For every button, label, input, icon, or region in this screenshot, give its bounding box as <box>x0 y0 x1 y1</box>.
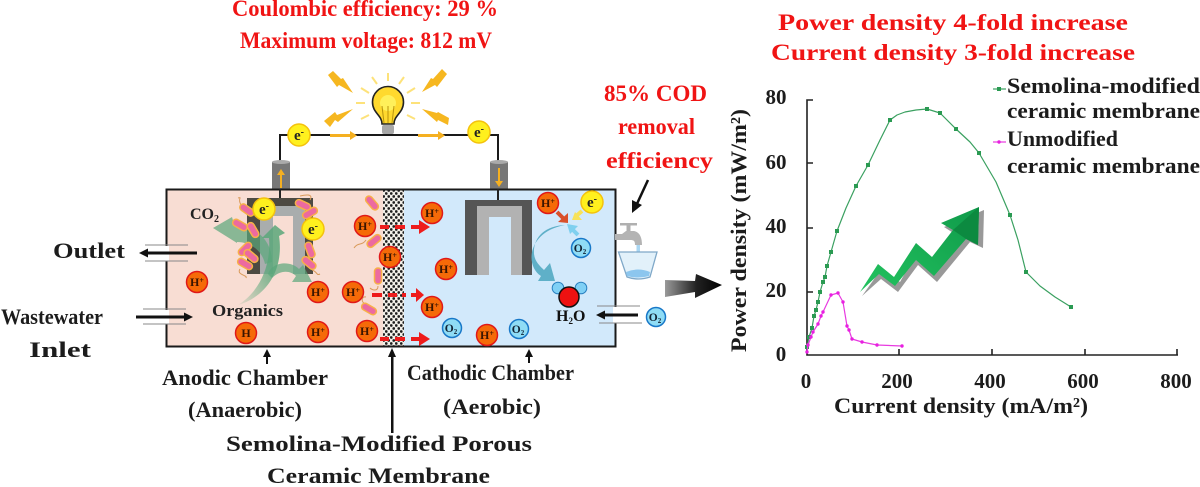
curved arrow to water <box>532 225 565 281</box>
protons: + <box>320 326 325 335</box>
y tick labels: 80 <box>766 85 786 109</box>
protons: H <box>360 324 369 338</box>
label: cathodic chamber: Cathodic Chamber <box>407 360 574 385</box>
x tick labels: 800 <box>1160 369 1192 393</box>
wire current arrows <box>330 131 445 140</box>
protons: + <box>320 286 325 295</box>
label: cathodic chamber <box>407 360 574 419</box>
heading: cell performance <box>232 0 498 53</box>
icon: green rising arrow <box>860 207 984 296</box>
x tick labels: 400 <box>974 369 1006 393</box>
reaction arrows at cathode <box>557 211 582 235</box>
chamber outline <box>166 190 616 346</box>
y tick labels: 40 <box>766 214 786 238</box>
callout: COD removal: removal <box>618 114 695 139</box>
callout: COD removal <box>604 81 714 173</box>
legend: semolina-modified <box>993 73 1200 123</box>
y axis title: Power density (mW/m²) <box>726 109 751 352</box>
electron in cathode: e <box>587 195 594 211</box>
oxygen molecules: 2 <box>521 329 525 337</box>
icon: light bulb <box>356 73 420 134</box>
arrow: cathodic pointer <box>525 349 533 363</box>
legend: semolina-modified: ceramic membrane <box>1007 98 1200 123</box>
protons: H <box>311 325 320 339</box>
protons: H <box>480 328 489 342</box>
x tick labels: 200 <box>881 369 913 393</box>
port: outlet <box>139 245 197 261</box>
port: inlet <box>136 309 193 324</box>
cathode electrode <box>465 189 532 275</box>
oxygen molecules: O <box>649 312 658 324</box>
y tick labels: 20 <box>766 278 786 302</box>
green metabolism arrows <box>213 217 312 305</box>
oxygen molecules: O <box>512 324 521 336</box>
protons: + <box>369 325 374 334</box>
protons: H <box>541 196 550 210</box>
port: oxygen inlet <box>596 306 642 323</box>
legend: semolina-modified: Semolina-modified <box>1007 73 1200 98</box>
y tick labels <box>766 85 786 366</box>
electron on anode side <box>302 218 324 240</box>
protons: H <box>346 285 355 299</box>
protons <box>186 192 558 346</box>
label: cathodic chamber: (Aerobic) <box>443 394 541 419</box>
icon: tap and glass <box>615 223 657 279</box>
label: H2O: O <box>573 308 585 325</box>
label: Organics: Organics <box>212 301 283 320</box>
protons: H <box>190 275 199 289</box>
label: outlet: Outlet <box>53 238 126 263</box>
label: membrane: Semolina-Modified Porous <box>226 431 533 456</box>
panel: cathodic chamber <box>404 189 615 347</box>
oxygen molecules: 2 <box>658 317 662 325</box>
heading: fold increases: Current density 3-fold increase <box>771 40 1135 65</box>
electron on wire right: - <box>481 124 484 135</box>
callout: COD removal: 85% COD <box>604 81 707 106</box>
protons: + <box>355 286 360 295</box>
label: CO2: 2 <box>214 214 219 225</box>
oxygen molecules: 2 <box>454 328 458 336</box>
external circuit wire <box>280 135 498 161</box>
electron on wire left: e <box>294 128 301 144</box>
x tick labels: 600 <box>1067 369 1099 393</box>
series: unmodified <box>805 291 904 354</box>
protons: H <box>425 206 434 220</box>
chart: power density curves <box>726 85 1192 418</box>
label: H2O: H <box>556 308 568 325</box>
oxygen molecules <box>442 238 666 338</box>
legend: unmodified: ceramic membrane <box>1007 153 1200 178</box>
protons: H <box>358 219 367 233</box>
callout: COD removal: efficiency <box>606 148 714 173</box>
protons: + <box>550 197 555 206</box>
protons: + <box>367 220 372 229</box>
arrow: COD to outlet tap <box>632 180 648 213</box>
panel: anodic chamber <box>166 189 384 347</box>
oxygen molecules: O <box>445 323 454 335</box>
electron on anode top <box>253 198 275 220</box>
electron on anode side: - <box>315 221 318 232</box>
icon: lightning bolts <box>324 69 449 127</box>
protons: H <box>425 300 434 314</box>
proton transfer dashes and arrows <box>372 220 430 346</box>
anode electrode <box>247 189 313 274</box>
protons: + <box>434 207 439 216</box>
electron on anode top: - <box>266 201 269 212</box>
label: wastewater inlet: Wastewater <box>1 304 103 329</box>
water molecule <box>552 282 587 307</box>
label: anodic chamber <box>162 365 328 422</box>
semolina-modified porous ceramic membrane <box>383 190 404 346</box>
x tick labels <box>801 369 1192 393</box>
arrow: membrane pointer <box>388 348 396 433</box>
label: anodic chamber: Anodic Chamber <box>162 365 328 390</box>
label: H2O: 2 <box>568 316 573 326</box>
electron on anode side: e <box>308 222 315 238</box>
anode terminal <box>272 160 290 189</box>
electron on wire right <box>468 121 490 143</box>
heading: fold increases: Power density 4-fold increase <box>778 10 1128 35</box>
protons: + <box>448 263 453 272</box>
cathode terminal <box>490 160 508 189</box>
label: anodic chamber: (Anaerobic) <box>188 397 302 422</box>
arrow: to chart <box>665 274 722 298</box>
heading: fold increases <box>771 10 1135 65</box>
electron in cathode <box>581 191 603 213</box>
oxygen molecules: O <box>574 243 583 255</box>
y tick labels: 0 <box>776 342 786 366</box>
protons: + <box>489 329 494 338</box>
label: wastewater inlet: Inlet <box>29 337 92 362</box>
oxygen molecules: 2 <box>583 248 587 256</box>
protons: + <box>392 251 397 260</box>
electron on wire left: - <box>301 127 304 138</box>
protons: + <box>199 276 204 285</box>
heading: cell performance: Maximum voltage: 812 mV <box>240 28 492 53</box>
electron on wire left <box>288 124 310 146</box>
protons: H <box>311 285 320 299</box>
y tick labels: 60 <box>766 150 786 174</box>
arrow: anodic pointer <box>263 349 271 364</box>
protons: H <box>383 250 392 264</box>
label: CO2: CO <box>190 206 214 223</box>
x tick labels: 0 <box>801 369 811 393</box>
series: semolina-modified <box>805 107 1073 349</box>
protons: H <box>439 262 448 276</box>
legend: unmodified: Unmodified <box>1007 126 1118 151</box>
electron on wire right: e <box>474 125 481 141</box>
chart axes <box>807 100 1178 355</box>
protons: + <box>434 301 439 310</box>
label: membrane <box>226 431 533 487</box>
label: wastewater inlet <box>1 304 103 362</box>
icon: bacteria <box>231 195 382 316</box>
x axis title: Current density (mA/m²) <box>834 393 1088 418</box>
electron in cathode: - <box>594 194 597 205</box>
protons: H <box>241 326 251 340</box>
electron on anode top: e <box>259 202 266 218</box>
legend: unmodified <box>993 126 1200 178</box>
